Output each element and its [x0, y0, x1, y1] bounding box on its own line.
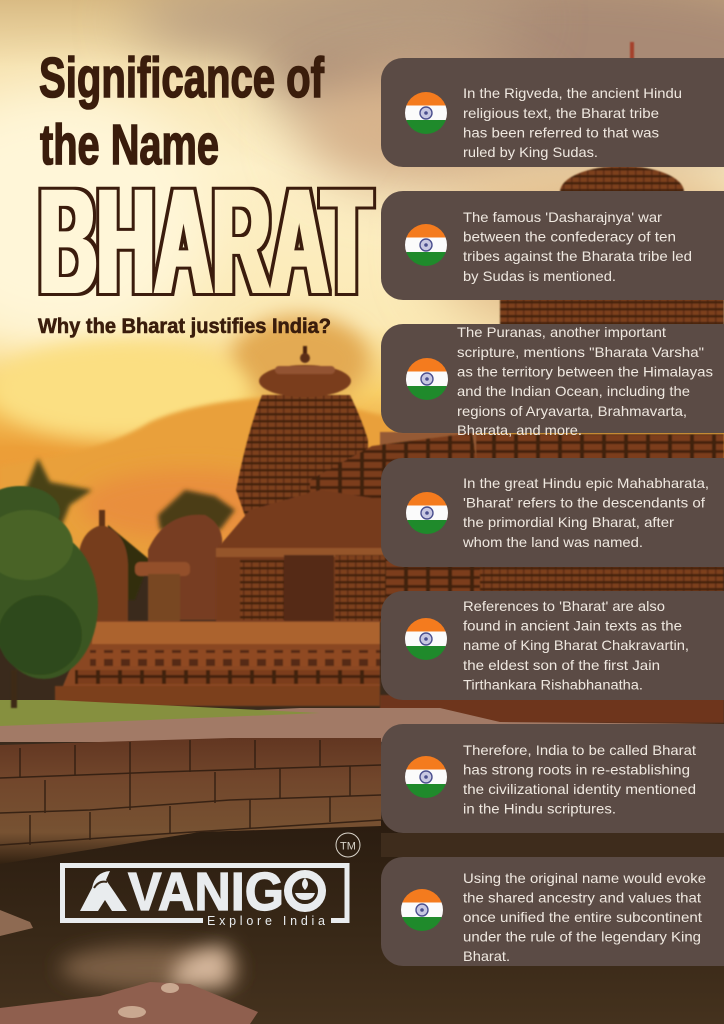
- panel text: has been referred to that was: [463, 124, 659, 140]
- panel text: name of King Bharat Chakravartin,: [463, 637, 689, 653]
- back shrines and palms: [25, 458, 235, 625]
- icon: Indian flag: [406, 358, 448, 400]
- panel text: [463, 598, 689, 692]
- panel text: [462, 475, 709, 550]
- icon: Indian flag: [405, 224, 447, 266]
- logo: Avanigo Explore India: [62, 833, 360, 928]
- panel text: [463, 870, 706, 964]
- panel text: [463, 209, 692, 284]
- right temple tower behind panels: [380, 42, 724, 723]
- dark water band and pond: [0, 820, 724, 1024]
- panel text: the eldest son of the first Jain: [463, 657, 660, 673]
- subtitle: Why the Bharat justifies India?: [38, 315, 331, 338]
- temple plinth with frieze: [55, 621, 380, 706]
- panel text: once unified the entire subcontinent: [463, 909, 702, 925]
- panel text: References to 'Bharat' are also: [463, 598, 665, 614]
- main temple tower: [216, 346, 480, 622]
- panel text: In the Rigveda, the ancient Hindu: [463, 85, 682, 101]
- pavement: [0, 708, 724, 742]
- panel text: regions of Aryavarta, Brahmavarta,: [457, 403, 687, 419]
- icon: elephant A: [80, 871, 127, 911]
- panel text: has strong roots in re-establishing: [463, 762, 690, 778]
- icon: Indian flag: [405, 618, 447, 660]
- title line 1: Significance of: [39, 46, 325, 110]
- panel: Rigveda: [381, 58, 724, 167]
- tagline: Explore India: [207, 914, 325, 928]
- title: Significance of the Name: [39, 46, 325, 177]
- panel text: Therefore, India to be called Bharat: [463, 742, 696, 758]
- panel text: by Sudas is mentioned.: [463, 268, 616, 284]
- panel text: ruled by King Sudas.: [463, 144, 598, 160]
- panel text: as the territory between the Himalayas: [457, 364, 713, 380]
- grass: [0, 700, 320, 726]
- panel: Dasharajnya war: [381, 191, 724, 300]
- panel text: [457, 324, 713, 438]
- outlined word BHARAT: BHARAT: [39, 157, 371, 325]
- panel text: In the great Hindu epic Mahabharata,: [463, 475, 709, 491]
- logo frame: [62, 866, 347, 920]
- panel: original name: [381, 857, 724, 966]
- trademark badge: TM: [340, 840, 356, 852]
- stone embankment wall: [0, 738, 381, 864]
- panel text: scripture, mentions "Bharata Varsha": [457, 344, 704, 360]
- panel text: and the Indian Ocean, including the: [457, 383, 690, 399]
- panel text: between the confederacy of ten: [463, 228, 676, 244]
- icon: Indian flag: [405, 756, 447, 798]
- panel text: [463, 85, 682, 160]
- icon: O with lamp: [288, 874, 322, 908]
- panel text: The Puranas, another important: [457, 324, 666, 340]
- panel text: The famous 'Dasharajnya' war: [463, 209, 662, 225]
- icon: Indian flag: [401, 889, 443, 931]
- panel: Puranas: [381, 324, 724, 438]
- panel text: under the rule of the legendary King: [463, 928, 701, 944]
- panel text: the primordial King Bharat, after: [463, 514, 674, 530]
- foreground rock: [0, 982, 258, 1024]
- panel text: tribes against the Bharata tribe led: [463, 248, 692, 264]
- panel text: the shared ancestry and values that: [463, 890, 701, 906]
- panel text: Bharata, and more.: [457, 422, 582, 438]
- panel text: Bharat.: [463, 948, 510, 964]
- title line 2: the Name: [40, 113, 219, 177]
- trademark badge: [336, 833, 360, 857]
- panel text: found in ancient Jain texts as the: [463, 618, 682, 634]
- panel: Jain texts: [381, 591, 724, 700]
- panel text: 'Bharat' refers to the descendants of: [463, 494, 705, 510]
- panel text: religious text, the Bharat tribe: [463, 105, 659, 121]
- tree: [0, 486, 98, 708]
- sky: [0, 0, 724, 560]
- wordmark: VANIG: [128, 862, 284, 922]
- panel text: Using the original name would evoke: [463, 870, 706, 886]
- panel text: Tirthankara Rishabhanatha.: [463, 676, 643, 692]
- panel: civilizational identity: [381, 724, 724, 833]
- panel: Mahabharata: [381, 458, 724, 567]
- panel text: [463, 742, 696, 816]
- panel text: in the Hindu scriptures.: [463, 800, 616, 816]
- panel text: the civilizational identity mentioned: [463, 781, 696, 797]
- panel text: whom the land was named.: [462, 534, 643, 550]
- icon: Indian flag: [405, 92, 447, 134]
- icon: Indian flag: [406, 492, 448, 534]
